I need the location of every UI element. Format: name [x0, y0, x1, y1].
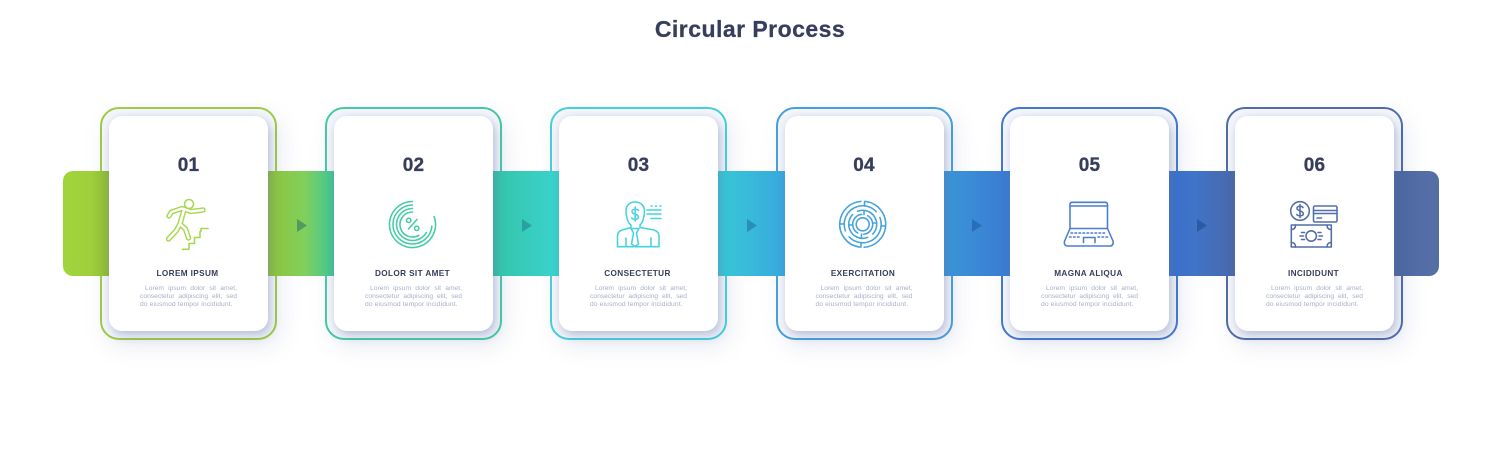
icon: percent radar: [388, 200, 436, 248]
description: Lorem ipsum dolor sit amet,: [595, 285, 687, 292]
band: right cap: [1390, 171, 1439, 276]
panel: step 03: [550, 107, 734, 350]
panel: step 06: [1226, 107, 1410, 350]
icon: running up stairs: [166, 198, 209, 250]
band: connector 2 to 3: [493, 171, 560, 276]
number 03: 03: [628, 154, 649, 176]
description: do eiusmod tempor incididunt.: [1041, 301, 1134, 308]
number 04: 04: [853, 154, 875, 176]
description: [365, 285, 462, 308]
description: [140, 285, 237, 308]
panel: step 04: [776, 107, 960, 350]
icon: labyrinth: [838, 200, 886, 248]
label: MAGNA ALIQUA: [1054, 269, 1123, 278]
band: connector 5 to 6: [1168, 171, 1235, 276]
panel: step 05: [1001, 107, 1184, 350]
label: INCIDIDUNT: [1288, 269, 1339, 278]
icon: businessman with dollar: [616, 201, 662, 248]
description: [816, 285, 912, 308]
description: consectetur adipiscing elit, sed: [140, 293, 237, 300]
description: do eiusmod tempor incididunt.: [816, 301, 908, 308]
number 06: 06: [1304, 154, 1325, 176]
description: Lorem ipsum dolor sit amet,: [1271, 285, 1363, 292]
description: consectetur adipiscing elit, sed: [1041, 293, 1138, 300]
band: connector 3 to 4: [718, 171, 785, 276]
description: Lorem ipsum dolor sit amet,: [1046, 285, 1138, 292]
band: connector 4 to 5: [943, 171, 1010, 276]
band: left cap: [63, 171, 113, 276]
description: Lorem ipsum dolor sit amet,: [145, 285, 237, 292]
description: [590, 285, 687, 308]
number 01: 01: [178, 154, 199, 176]
number 02: 02: [403, 154, 424, 176]
panel: step 02: [325, 107, 508, 350]
panel: step 01: [100, 107, 284, 350]
number 05: 05: [1079, 154, 1100, 176]
label: EXERCITATION: [831, 269, 895, 278]
description: Lorem ipsum dolor sit amet,: [820, 285, 912, 292]
label: CONSECTETUR: [604, 269, 671, 278]
description: do eiusmod tempor incididunt.: [140, 301, 233, 308]
band: connector 1 to 2: [268, 171, 335, 276]
title: Circular Process: [655, 16, 845, 42]
description: do eiusmod tempor incididunt.: [365, 301, 458, 308]
label: DOLOR SIT AMET: [375, 269, 450, 278]
label: LOREM IPSUM: [157, 269, 218, 278]
description: consectetur adipiscing elit, sed: [816, 293, 912, 300]
icon: money and card: [1290, 200, 1338, 248]
description: Lorem ipsum dolor sit amet,: [370, 285, 462, 292]
description: consectetur adipiscing elit, sed: [365, 293, 462, 300]
description: do eiusmod tempor incididunt.: [590, 301, 683, 308]
description: [1266, 285, 1363, 308]
icon: laptop: [1064, 202, 1114, 247]
description: consectetur adipiscing elit, sed: [590, 293, 687, 300]
description: [1041, 285, 1138, 308]
description: do eiusmod tempor incididunt.: [1266, 301, 1359, 308]
description: consectetur adipiscing elit, sed: [1266, 293, 1363, 300]
